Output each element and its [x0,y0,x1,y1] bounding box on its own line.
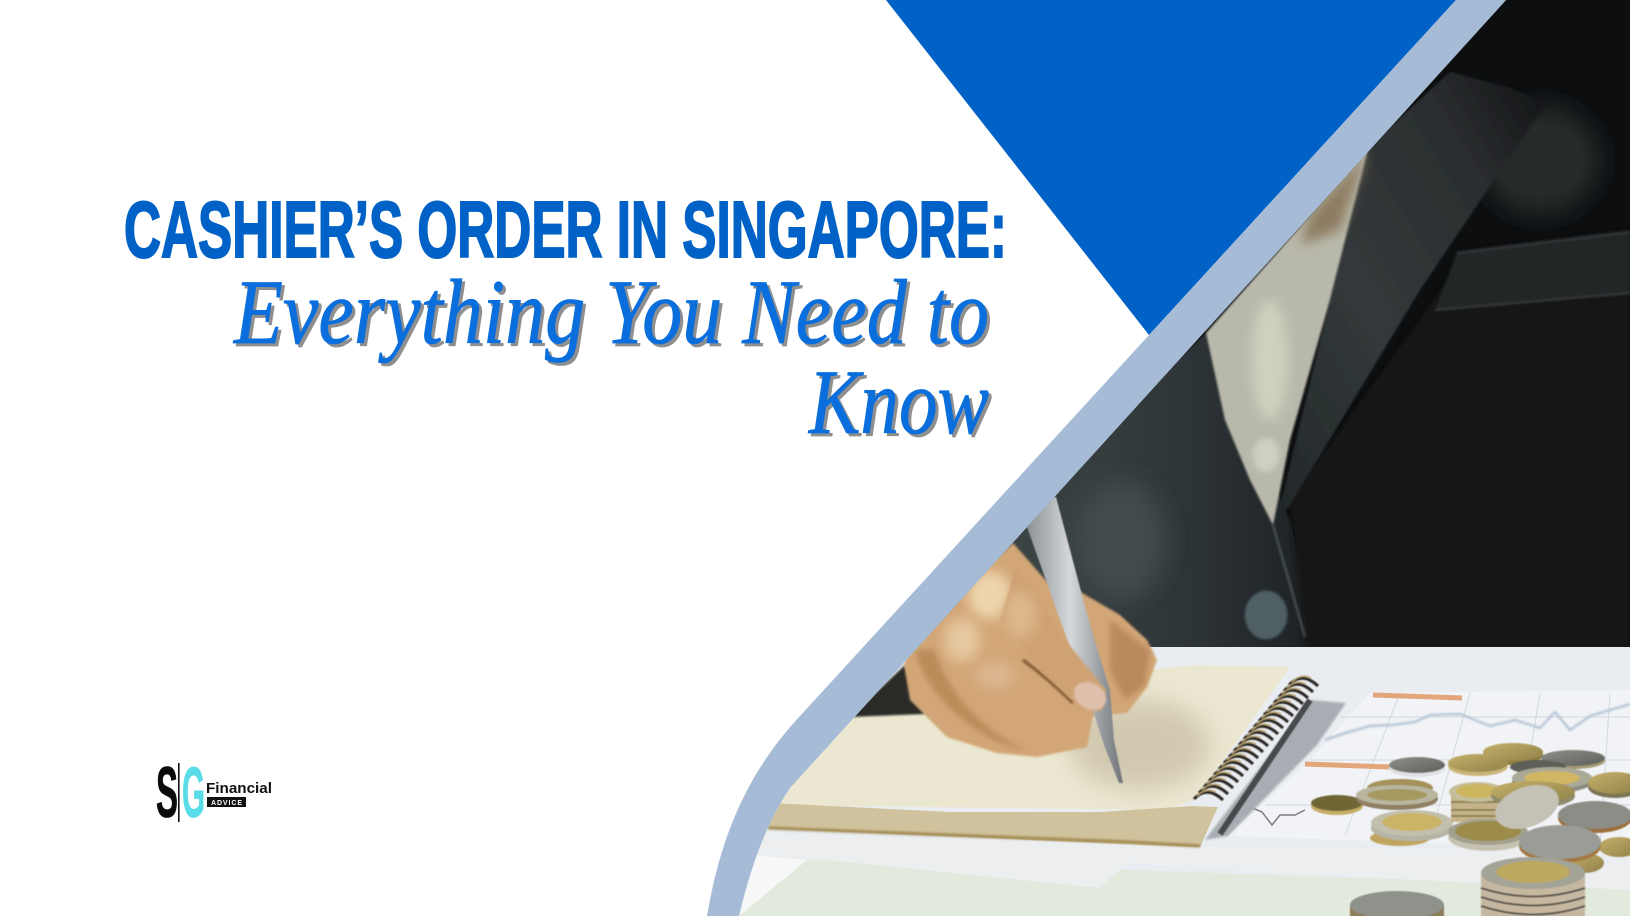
notebook spiral rings [1194,676,1318,800]
chart grid [1265,693,1630,850]
light blue swoosh band [707,0,1506,916]
title [124,185,1007,453]
jacket button [1244,590,1288,640]
pocket flap top line [1435,232,1630,310]
chart paper [1228,690,1630,850]
jacket front right [1290,294,1628,647]
photo: businessman writing in notebook with coins [700,0,1630,916]
table green lower [700,860,1630,916]
logo divider [178,763,180,822]
index finger highlight [1004,591,1036,639]
small chart line [1252,808,1306,826]
jacket seam [1273,525,1305,637]
lower finger shadow [914,648,1018,748]
second knuckle highlight [944,618,980,662]
logo: SG Financial Advice: G [182,754,205,833]
logo word Advice: ADVICE [211,800,242,807]
single small coin stack [1350,891,1444,916]
pen [1027,497,1123,783]
hand highlight [968,571,1012,619]
coin: back row [1389,743,1630,798]
logo: SG Financial Advice [156,754,272,833]
notebook shadow [1205,700,1346,840]
blue triangle [886,0,1456,335]
right lapel [1279,72,1546,510]
coin: middle stack [1448,777,1630,873]
shirt button [1253,438,1279,472]
coin: left cluster [1311,779,1453,846]
logo badge [207,797,246,807]
logo: SG Financial Advice: S [156,754,178,833]
shirt [1206,150,1368,525]
thumb shadow [1110,620,1150,700]
lower paper [839,861,1630,890]
index fingertip [1000,570,1106,712]
subheading script: Everything You Need to [232,261,989,363]
page thickness [768,803,1218,847]
orange chart bars [1305,695,1462,767]
table top [757,647,1630,880]
suit background [908,0,1630,658]
shirt highlight [1252,300,1288,420]
finger crease [1023,660,1073,703]
fingernail [1069,676,1111,716]
notebook spine shadow [1220,700,1310,834]
coin stack foreground [1481,857,1585,916]
logo word Financial: Financial [206,780,272,797]
pocket flap [1435,232,1630,310]
hand [904,543,1157,757]
subheading script [232,261,989,453]
notebook page [760,665,1290,810]
white corner [739,856,806,916]
page shade [1070,700,1210,790]
chest highlight [1480,105,1600,215]
subheading script: Know [807,351,989,453]
knuckle detail [975,661,1015,689]
shirt collar shade [1300,150,1368,245]
page edge [768,828,1200,846]
jacket blotch [1075,480,1165,600]
left jacket panel [992,333,1306,647]
chart line [1325,704,1630,740]
heading: Cashier's Order: CASHIER’S ORDER IN SINGAPORE: [124,185,1007,274]
sleeve [850,665,925,717]
